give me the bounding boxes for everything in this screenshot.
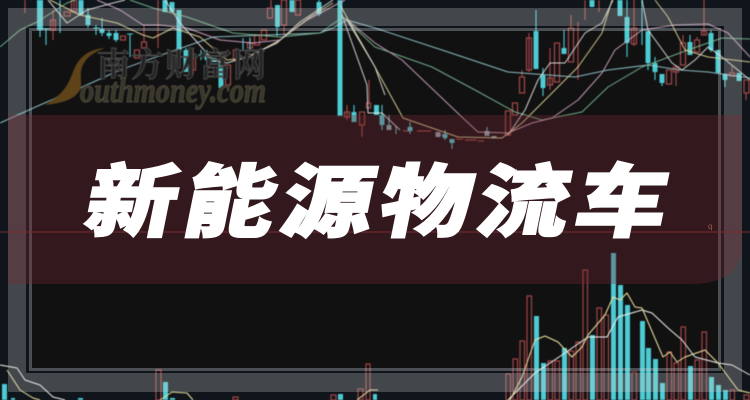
- long blue line: [0, 20, 750, 123]
- logo swoosh: [45, 48, 105, 105]
- watermark logo: [45, 39, 267, 110]
- logo Chinese name: 南方财富网: [97, 39, 267, 86]
- volume bars: [0, 253, 750, 400]
- candlestick chart: [25, 0, 749, 149]
- green line: [0, 0, 75, 47]
- title: 新能源物流车: [77, 138, 681, 253]
- white line: [48, 0, 125, 23]
- pink line: [97, 0, 345, 43]
- red volume bars: [156, 270, 749, 400]
- grey candles: [386, 125, 496, 138]
- cyan candles: [37, 0, 742, 143]
- red candle wicks: [25, 0, 746, 141]
- maroon title panel: [8, 115, 742, 284]
- moving average lines: [0, 0, 750, 138]
- cyan candle wicks: [40, 0, 725, 149]
- cream line: [50, 0, 333, 60]
- cyan volume bars: [2, 253, 728, 400]
- volume average lines: [0, 293, 750, 400]
- reference price line: q: [708, 222, 712, 231]
- red candles: [50, 0, 749, 135]
- logo website: outhmoney.com: [80, 71, 266, 110]
